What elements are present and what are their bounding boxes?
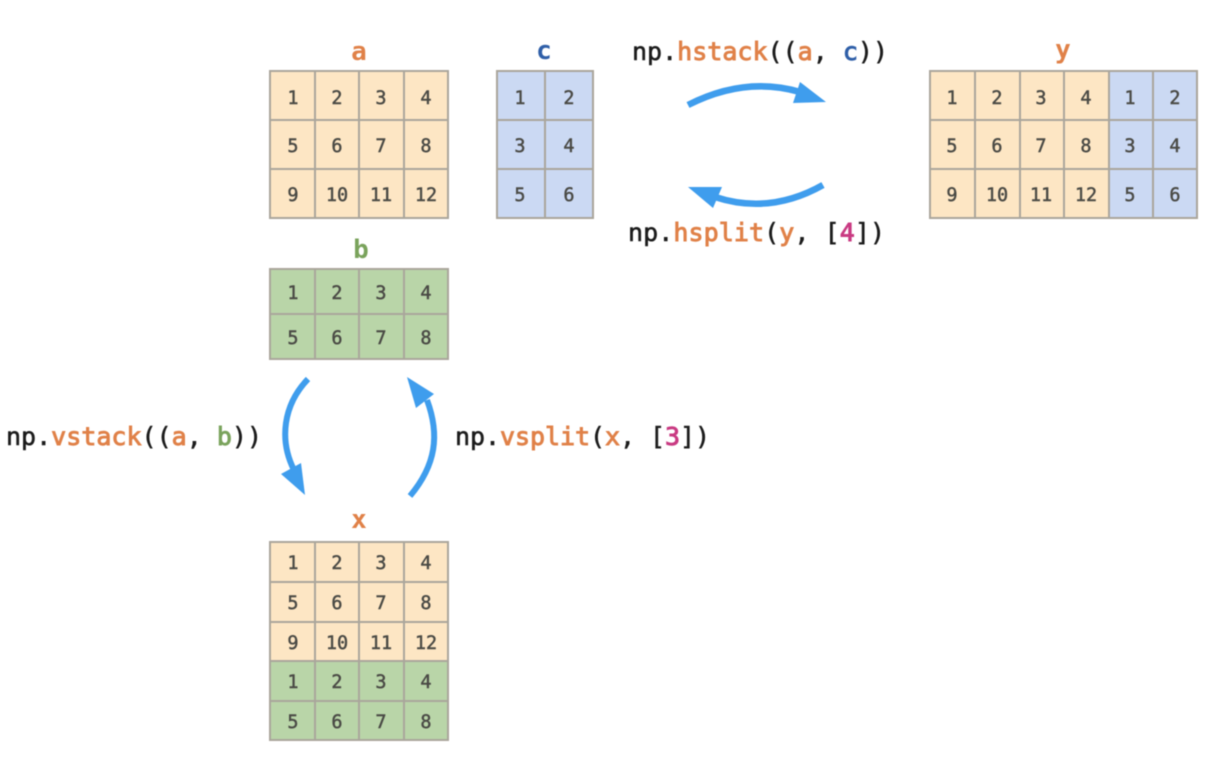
grid: array a: 7 [375, 136, 387, 157]
arrow: hstack [688, 82, 826, 105]
grid: array x: 2 [331, 553, 343, 574]
heading: array c: c [536, 36, 552, 66]
grid: array b: 2 [331, 283, 343, 304]
grid: array b: 8 [420, 328, 432, 349]
grid: array x: 3 [375, 553, 387, 574]
grid: array x: 1 [287, 672, 299, 693]
grid: array c: 3 [514, 136, 526, 157]
heading: array x: x [351, 505, 367, 535]
grid: array c: 5 [514, 185, 526, 206]
arrow: vsplit [407, 377, 434, 496]
grid: array y: 12 [1075, 185, 1097, 206]
grid: array a: 1 [287, 88, 299, 109]
grid: array x: 5 [287, 593, 299, 614]
grid: array b: 4 [420, 283, 432, 304]
grid: array c: 4 [563, 136, 575, 157]
grid: array a: 8 [420, 136, 432, 157]
grid: array y: 5 [1124, 185, 1136, 206]
grid: array y: 1 [1124, 88, 1136, 109]
grid: array c: 1 [514, 88, 526, 109]
grid: array y: 8 [1080, 136, 1092, 157]
grid: array x: 3 [375, 672, 387, 693]
grid: array c: 6 [563, 185, 575, 206]
grid: array b: 3 [375, 283, 387, 304]
grid: array y: 9 [946, 185, 958, 206]
grid: array y: 10 [986, 185, 1008, 206]
grid: array y: 2 [1169, 88, 1181, 109]
label: np.hstack: np.hstack((a, c)) [632, 37, 888, 66]
heading: array a: a [351, 37, 367, 67]
grid: array a: 2 [331, 88, 343, 109]
grid: array y: 3 [1124, 136, 1136, 157]
grid: array x: 5 [287, 712, 299, 733]
grid: array x [270, 542, 448, 740]
grid: array b: 7 [375, 328, 387, 349]
grid: array y: 11 [1030, 185, 1052, 206]
grid: array y: 4 [1080, 88, 1092, 109]
grid: array b: 1 [287, 283, 299, 304]
grid: array x: 10 [326, 633, 348, 654]
arrow: vstack [281, 379, 308, 495]
grid: array y: 7 [1035, 136, 1047, 157]
grid: array x: 12 [415, 633, 437, 654]
grid: array y: 3 [1035, 88, 1047, 109]
grid: array b: 5 [287, 328, 299, 349]
grid: array a: 9 [287, 185, 299, 206]
grid: array x: 8 [420, 593, 432, 614]
grid: array x: 2 [331, 672, 343, 693]
label: np.vstack: np.vstack((a, b)) [6, 422, 262, 451]
grid: array x: 11 [370, 633, 392, 654]
grid: array a: 11 [370, 185, 392, 206]
grid: array a: 10 [326, 185, 348, 206]
grid: array x: 9 [287, 633, 299, 654]
grid: array a: 6 [331, 136, 343, 157]
grid: array c: 2 [563, 88, 575, 109]
grid: array y: 6 [1169, 185, 1181, 206]
grid: array b: 6 [331, 328, 343, 349]
grid: array x: 6 [331, 712, 343, 733]
grid: array x: 4 [420, 672, 432, 693]
grid: array x: 8 [420, 712, 432, 733]
grid: array y: 4 [1169, 136, 1181, 157]
grid: array x: 6 [331, 593, 343, 614]
grid: array x: 1 [287, 553, 299, 574]
grid: array a: 4 [420, 88, 432, 109]
grid: array a: 5 [287, 136, 299, 157]
grid: array y: 5 [946, 136, 958, 157]
grid: array b [270, 269, 448, 359]
grid: array c [497, 71, 593, 218]
grid: array a [270, 71, 448, 218]
grid: array x: 4 [420, 553, 432, 574]
grid: array y: 1 [946, 88, 958, 109]
grid: array y: 6 [991, 136, 1003, 157]
grid: array a: 12 [415, 185, 437, 206]
grid: array y [930, 71, 1197, 218]
grid: array x: 7 [375, 712, 387, 733]
heading: array y: y [1055, 35, 1071, 65]
grid: array a: 3 [375, 88, 387, 109]
grid: array y: 2 [991, 88, 1003, 109]
heading: array b: b [353, 235, 369, 265]
label: np.hsplit: np.hsplit(y, [4]) [628, 218, 885, 247]
grid: array x: 7 [375, 593, 387, 614]
arrow: hsplit [688, 185, 823, 208]
label: np.vsplit: np.vsplit(x, [3]) [455, 422, 710, 451]
